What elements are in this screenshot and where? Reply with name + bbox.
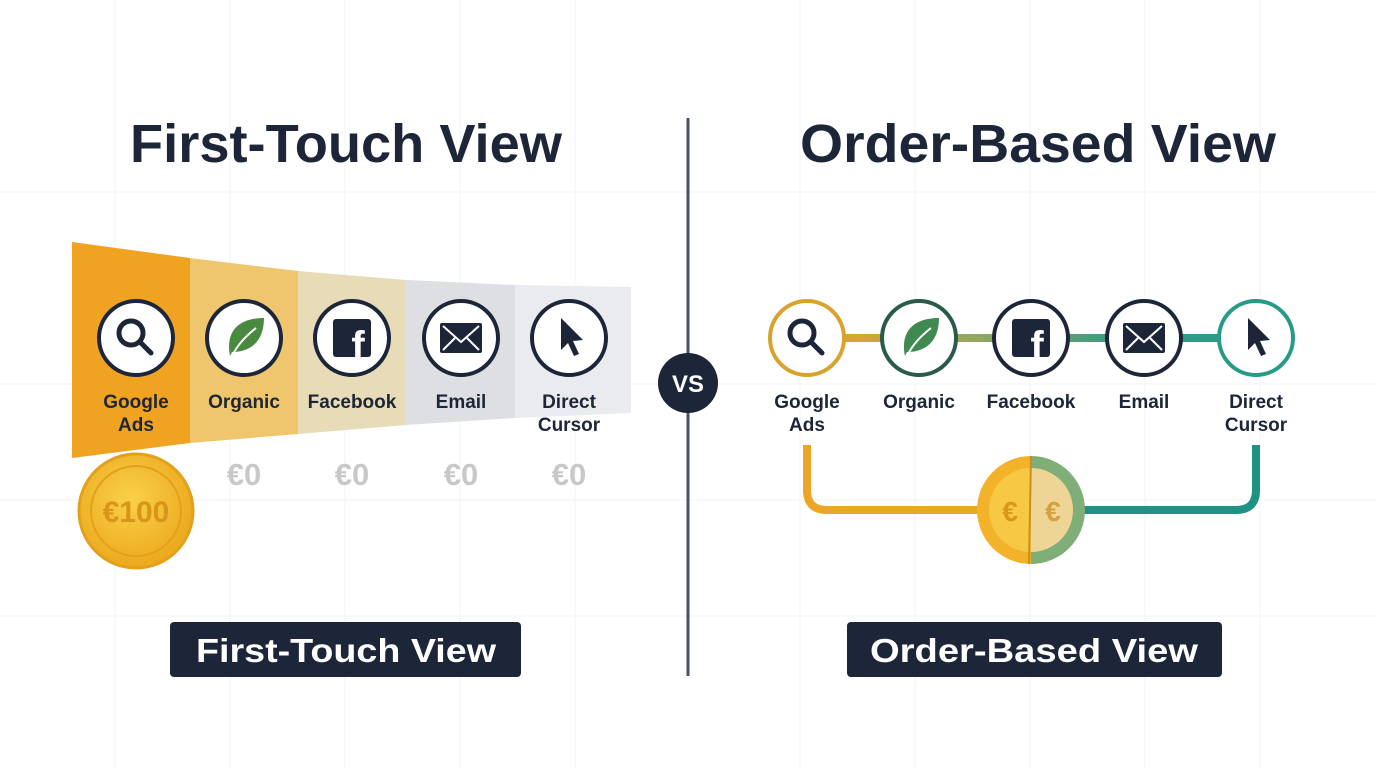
label box: first-touch: First-Touch View: [196, 632, 496, 669]
zero values: [227, 457, 586, 492]
labels: Email: [436, 392, 486, 413]
zero values: €0: [335, 457, 369, 492]
icon: leaf: [207, 301, 281, 375]
labels: Facebook: [987, 392, 1076, 413]
coin: split: €: [1002, 496, 1018, 527]
title: first-touch: First-Touch View: [130, 114, 563, 174]
icon: facebook: [315, 301, 389, 375]
vs badge: [658, 353, 718, 413]
icon: cursor: [1219, 301, 1293, 375]
labels: Email: [1119, 392, 1169, 413]
coin: split: €: [1045, 496, 1061, 527]
labels: Direct: [1229, 392, 1284, 413]
label box: order-based: [847, 622, 1222, 677]
icon: email: [1107, 301, 1181, 375]
label box: first-touch: [170, 622, 521, 677]
title: order-based: Order-Based View: [800, 114, 1277, 174]
icon: search: [770, 301, 844, 375]
labels: Google: [103, 392, 169, 413]
icon: facebook: f: [351, 324, 365, 368]
labels: Ads: [789, 415, 825, 436]
zero values: €0: [552, 457, 586, 492]
coin: split: [977, 456, 1085, 564]
divider: [686, 118, 690, 676]
labels: Organic: [208, 392, 280, 413]
zero values: €0: [227, 457, 261, 492]
vs badge: VS: [672, 371, 704, 398]
labels: Cursor: [538, 415, 601, 436]
panel: first-touch funnel: [72, 242, 631, 458]
icon: email: [424, 301, 498, 375]
icon: facebook: [994, 301, 1068, 375]
coin: €100: [79, 454, 193, 568]
labels: [774, 392, 1288, 436]
icon: facebook: f: [1030, 324, 1044, 368]
label box: order-based: Order-Based View: [870, 632, 1198, 669]
labels: [103, 392, 601, 436]
labels: Google: [774, 392, 840, 413]
icon: cursor: [532, 301, 606, 375]
coin: €100: €100: [103, 496, 169, 529]
labels: Organic: [883, 392, 955, 413]
labels: Cursor: [1225, 415, 1288, 436]
labels: Facebook: [308, 392, 397, 413]
panel: order-based path: [770, 301, 1293, 564]
labels: Direct: [542, 392, 597, 413]
icon: leaf: [882, 301, 956, 375]
zero values: €0: [444, 457, 478, 492]
icon: search: [99, 301, 173, 375]
labels: Ads: [118, 415, 154, 436]
